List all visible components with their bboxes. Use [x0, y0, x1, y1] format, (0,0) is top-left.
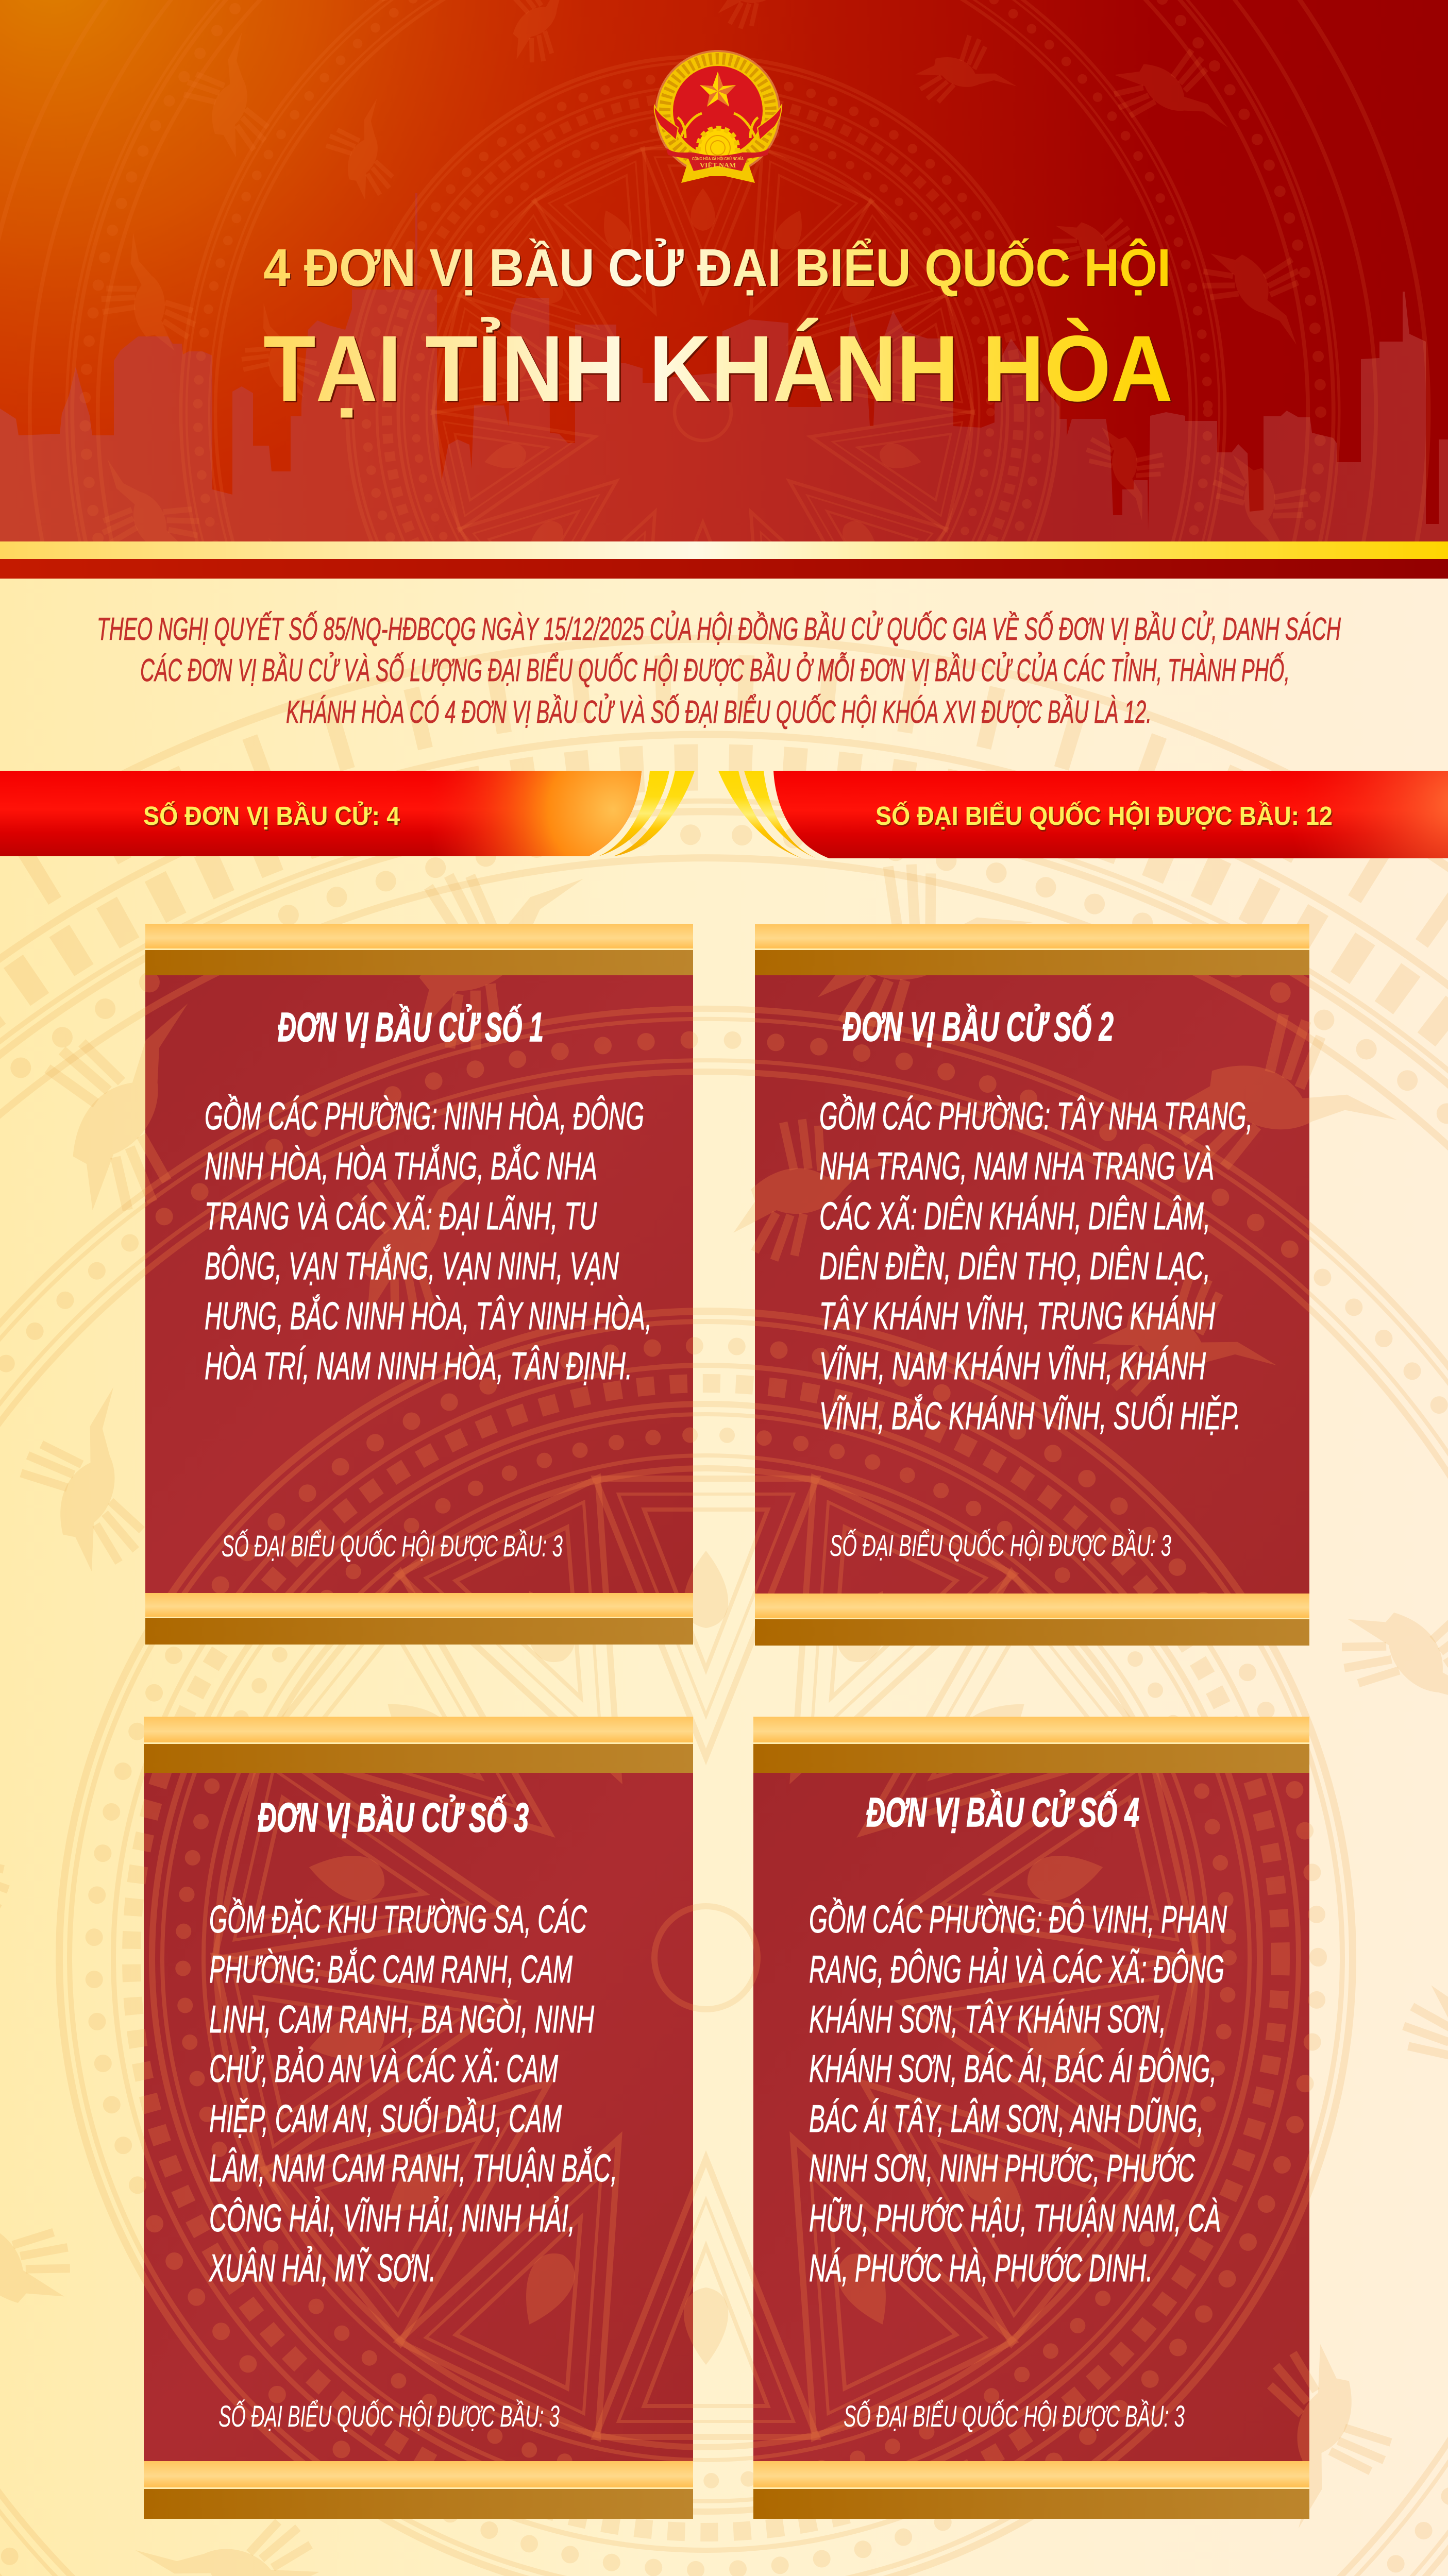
- text block: NÁ, PHƯỚC HÀ, PHƯỚC DINH.: [809, 2246, 1153, 2290]
- banner label: SỐ ĐƠN VỊ BẦU CỬ: 4: [143, 801, 400, 831]
- text block: [205, 1094, 652, 1387]
- text block: HÒA TRÍ, NAM NINH HÒA, TÂN ĐỊNH.: [205, 1344, 632, 1387]
- text block: CÔNG HẢI, VĨNH HẢI, NINH HẢI,: [209, 2196, 575, 2240]
- ribbon stripes: right: [718, 771, 816, 859]
- red divider bar: [0, 559, 1448, 579]
- header panel: [0, 0, 1448, 1138]
- text block: BÁC ÁI TÂY, LÂM SƠN, ANH DŨNG,: [809, 2097, 1204, 2140]
- deputies count: SỐ ĐẠI BIỂU QUỐC HỘI ĐƯỢC BẦU: 3: [218, 2400, 560, 2433]
- deputies count: SỐ ĐẠI BIỂU QUỐC HỘI ĐƯỢC BẦU: 3: [844, 2400, 1185, 2433]
- text block: KHÁNH SƠN, TÂY KHÁNH SƠN,: [809, 1997, 1166, 2041]
- text block: TÂY KHÁNH VĨNH, TRUNG KHÁNH: [819, 1294, 1216, 1337]
- panel: electoral unit 1: [0, 801, 1448, 2576]
- text block: BÔNG, VẠN THẮNG, VẠN NINH, VẠN: [205, 1244, 619, 1287]
- heading: ĐƠN VỊ BẦU CỬ SỐ 4: [866, 1789, 1139, 1835]
- panel: electoral unit 4: [0, 801, 1448, 2576]
- banner label: SỐ ĐẠI BIỂU QUỐC HỘI ĐƯỢC BẦU: 12: [877, 802, 1334, 832]
- icon: national emblem: CỘNG HÒA XÃ HỘI CHỦ NGHĨA: [692, 157, 744, 161]
- banner: number of units: [0, 771, 642, 856]
- background drum pattern: [0, 639, 1448, 2576]
- text block: XUÂN HẢI, MỸ SƠN.: [209, 2246, 436, 2290]
- heading: ĐƠN VỊ BẦU CỬ SỐ 1: [278, 1004, 544, 1050]
- text block: PHƯỜNG: BẮC CAM RANH, CAM: [209, 1947, 573, 1991]
- panel: electoral unit 2: [0, 801, 1448, 2576]
- text block: CÁC XÃ: DIÊN KHÁNH, DIÊN LÂM,: [819, 1194, 1210, 1238]
- title line 1: 4 ĐƠN VỊ BẦU CỬ ĐẠI BIỂU QUỐC HỘI: [264, 239, 1172, 298]
- title line 1: 4 ĐƠN VỊ BẦU CỬ ĐẠI BIỂU QUỐC HỘI: [263, 238, 1171, 297]
- text block: GỒM ĐẶC KHU TRƯỜNG SA, CÁC: [209, 1897, 587, 1941]
- text block: GỒM CÁC PHƯỜNG: NINH HÒA, ĐÔNG: [205, 1094, 644, 1138]
- icon: national emblem: VIỆT NAM: [700, 161, 736, 169]
- text block: NINH HÒA, HÒA THẮNG, BẮC NHA: [205, 1144, 597, 1188]
- text block: NINH SƠN, NINH PHƯỚC, PHƯỚC: [809, 2146, 1196, 2190]
- panel: electoral unit 3: [0, 801, 1448, 2576]
- text block: HIỆP, CAM AN, SUỐI DẦU, CAM: [209, 2097, 562, 2140]
- text block: TRANG VÀ CÁC XÃ: ĐẠI LÃNH, TU: [205, 1194, 597, 1238]
- banner: number of deputies: [773, 771, 1448, 858]
- icon: national emblem: [654, 50, 781, 183]
- text block: HƯNG, BẮC NINH HÒA, TÂY NINH HÒA,: [205, 1294, 652, 1337]
- ribbon stripes: left: [598, 771, 695, 856]
- text block: [809, 1897, 1227, 2290]
- title line 2: TẠI TỈNH KHÁNH HÒA: [265, 317, 1174, 422]
- text block: [209, 1897, 617, 2290]
- deputies count: SỐ ĐẠI BIỂU QUỐC HỘI ĐƯỢC BẦU: 3: [222, 1530, 563, 1563]
- page background: [0, 579, 1448, 2576]
- deputies count: SỐ ĐẠI BIỂU QUỐC HỘI ĐƯỢC BẦU: 3: [830, 1529, 1171, 1563]
- text block: [819, 1094, 1253, 1437]
- gold divider bar: [0, 541, 1448, 559]
- heading: ĐƠN VỊ BẦU CỬ SỐ 2: [843, 1004, 1114, 1049]
- text block: DIÊN ĐIỀN, DIÊN THỌ, DIÊN LẠC,: [819, 1244, 1210, 1287]
- skyline silhouette: [0, 193, 1448, 541]
- title line 2: TẠI TỈNH KHÁNH HÒA: [263, 316, 1173, 421]
- banner label: SỐ ĐẠI BIỂU QUỐC HỘI ĐƯỢC BẦU: 12: [875, 801, 1333, 831]
- banner label: SỐ ĐƠN VỊ BẦU CỬ: 4: [144, 802, 401, 832]
- intro text block: [97, 611, 1341, 730]
- text block: LINH, CAM RANH, BA NGÒI, NINH: [209, 1997, 595, 2041]
- heading: ĐƠN VỊ BẦU CỬ SỐ 3: [258, 1794, 529, 1840]
- text block: VĨNH, NAM KHÁNH VĨNH, KHÁNH: [819, 1344, 1206, 1387]
- text block: CHỬ, BẢO AN VÀ CÁC XÃ: CAM: [209, 2047, 558, 2090]
- text block: NHA TRANG, NAM NHA TRANG VÀ: [819, 1144, 1214, 1188]
- text block: LÂM, NAM CAM RANH, THUẬN BẮC,: [209, 2146, 617, 2190]
